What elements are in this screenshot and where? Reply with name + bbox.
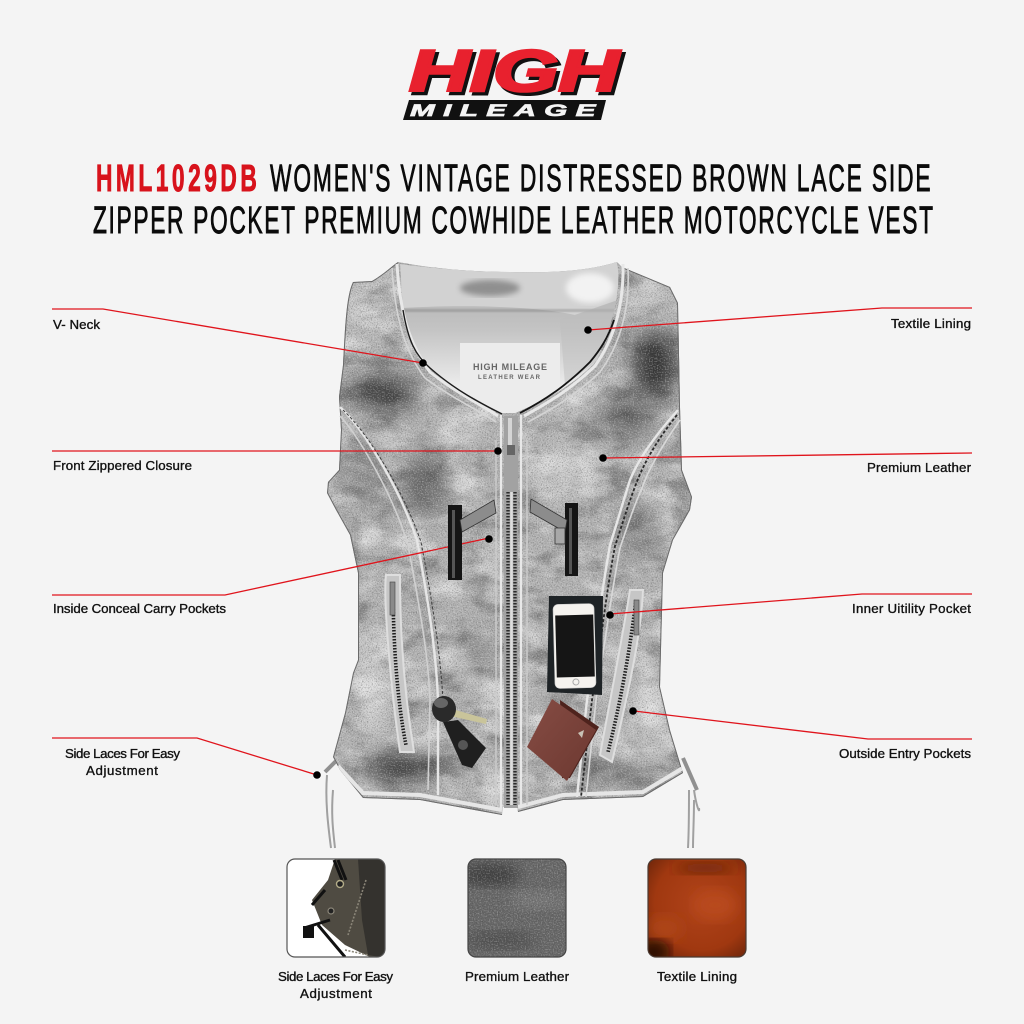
collar stitching — [392, 264, 628, 422]
vest illustration — [320, 255, 705, 848]
callout: Side Laces For Easy Adjustment: Side Laces For Easy — [65, 746, 180, 761]
left pocket zipper — [385, 575, 414, 752]
right pistol in conceal pocket — [530, 499, 578, 576]
callout: Inner Uitility Pocket: Inner Uitility Pocket — [852, 601, 971, 616]
callout: Side Laces For Easy Adjustment — [52, 738, 321, 779]
logo bar MILEAGE: MILEAGE — [410, 101, 597, 120]
callout: Side Laces For Easy Adjustment: Adjustment — [86, 763, 158, 778]
callout: Premium Leather — [599, 453, 972, 475]
callout: Textile Lining: Textile Lining — [891, 316, 971, 331]
callout: V- Neck — [52, 309, 427, 367]
title line 1: WOMEN'S VINTAGE DISTRESSED BROWN LACE SIDE — [270, 157, 931, 199]
side laces — [325, 757, 699, 848]
callout: Inner Uitility Pocket — [606, 594, 972, 619]
callout: Inside Conceal Carry Pockets — [52, 535, 493, 616]
smartphone on inner pocket — [547, 596, 603, 695]
centre front zipper — [496, 415, 527, 808]
logo word HIGH: HIGH — [409, 39, 621, 104]
neck label patch — [460, 343, 560, 415]
thumbnail: premium leather — [460, 859, 570, 957]
title line 2: ZIPPER POCKET PREMIUM COWHIDE LEATHER MOTORCYCLE VEST — [93, 199, 933, 241]
brown wallet — [527, 699, 599, 781]
neck lining — [400, 262, 618, 413]
caption: Textile Lining: Textile Lining — [657, 969, 737, 984]
callout: Outside Entry Pockets — [629, 707, 972, 761]
callout: Textile Lining — [584, 308, 972, 334]
title — [93, 157, 933, 241]
neck label patch: HIGH MILEAGE — [473, 362, 547, 372]
car key — [432, 696, 487, 768]
caption: Side Laces For Easy Adjustment: Side Laces For Easy — [278, 969, 393, 984]
vest body — [320, 255, 705, 820]
thumbnail: textile lining — [647, 858, 747, 958]
logo word HIGH: HIGH — [412, 42, 624, 107]
logo word HIGH — [409, 39, 624, 107]
caption: Side Laces For Easy Adjustment: Adjustment — [300, 986, 372, 1001]
vest hem shading — [338, 766, 683, 810]
left pistol in conceal pocket — [448, 500, 496, 580]
caption: Premium Leather: Premium Leather — [465, 969, 570, 984]
neck label patch: LEATHER WEAR — [478, 375, 541, 381]
thumbnail: side laces — [287, 859, 386, 958]
vest outer edge — [327, 262, 692, 815]
callout: V- Neck: V- Neck — [53, 317, 100, 332]
caption: Side Laces For Easy Adjustment — [278, 969, 393, 1001]
princess seams — [340, 407, 680, 797]
callout: Inside Conceal Carry Pockets: Inside Conceal Carry Pockets — [53, 601, 226, 616]
title line 1: HML1029DB — [96, 157, 257, 199]
right pocket zipper — [600, 590, 643, 762]
callout: Front Zippered Closure — [52, 447, 502, 473]
callout: Front Zippered Closure: Front Zippered Closure — [53, 458, 192, 473]
logo: High Mileage — [403, 39, 624, 120]
callout: Premium Leather: Premium Leather — [867, 460, 972, 475]
callout: Outside Entry Pockets: Outside Entry Pockets — [839, 746, 971, 761]
